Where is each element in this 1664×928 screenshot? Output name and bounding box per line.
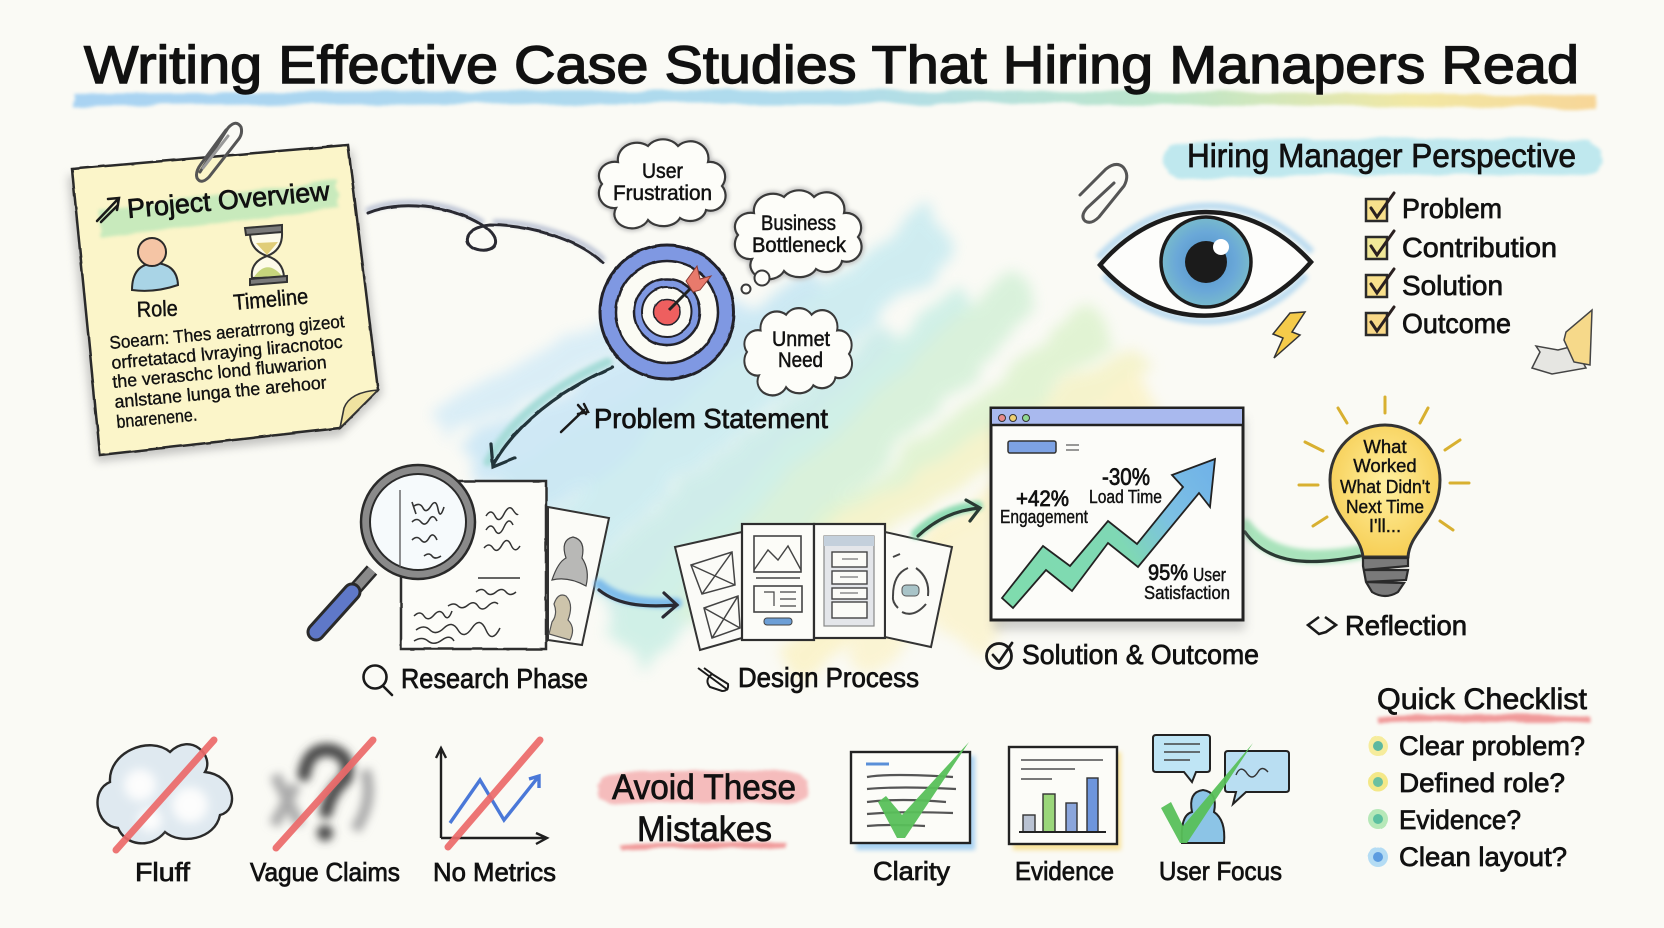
heading: avoid these mistakes: Avoid These	[612, 768, 796, 807]
mistake: fluff	[98, 740, 232, 887]
target bullseye	[600, 245, 734, 379]
mistake: no metrics	[433, 740, 556, 887]
icon: small dart	[561, 404, 588, 432]
label: design process: Design Process	[738, 662, 919, 693]
bulb text: Worked	[1353, 455, 1417, 476]
metric: engagement	[1000, 486, 1088, 527]
thought bubbles	[742, 270, 770, 294]
icon: dart	[669, 266, 711, 310]
checklist: contribution: Contribution	[1402, 232, 1557, 263]
panel: research phase	[316, 465, 609, 695]
metric: engagement: Engagement	[1000, 507, 1088, 527]
icon: pencil arrow	[97, 198, 119, 222]
note shadow	[68, 150, 382, 462]
heading: avoid these mistakes	[612, 768, 796, 849]
item: defined role: Defined role?	[1399, 768, 1565, 798]
metric: engagement: +42%	[1016, 486, 1069, 511]
light rays	[1299, 397, 1469, 530]
bulb text: What Didn't	[1340, 476, 1430, 497]
growth arrow chart	[1002, 459, 1215, 608]
icon: check circle	[986, 643, 1012, 668]
note body text: Soearn: Thes aeratrrong gizeot	[109, 311, 345, 353]
icon: small magnifier	[364, 666, 392, 695]
cloud: business bottleneck	[735, 190, 862, 279]
practice: user focus	[1153, 735, 1289, 886]
cloud: user frustration: Frustration	[613, 182, 712, 205]
heading highlight	[1182, 156, 1584, 160]
note folded corner	[340, 390, 378, 428]
panel: quick checklist	[1368, 683, 1590, 872]
panel: problem statement	[561, 139, 862, 434]
panel: project overview sticky note	[68, 123, 382, 462]
arrow: solution to reflection	[1245, 526, 1362, 562]
label: solution and outcome: Solution & Outcome	[1022, 639, 1259, 670]
section: mistakes to avoid	[98, 740, 796, 887]
title	[74, 36, 1596, 102]
item: evidence: Evidence?	[1399, 805, 1521, 835]
wireframe panel 1	[675, 532, 742, 650]
practice: user focus: User Focus	[1159, 856, 1282, 886]
watercolor diagonal wash	[440, 225, 1150, 665]
icon: paperclip	[1080, 164, 1127, 222]
metric: load time: -30%	[1102, 464, 1150, 491]
mistake: vague claims: Vague Claims	[250, 857, 400, 887]
icon: magnifying glass	[316, 465, 475, 632]
arrow: note to target	[368, 203, 603, 263]
icon: hourglass	[245, 225, 287, 285]
title underline brush stroke	[74, 97, 1596, 102]
heading underline	[1378, 718, 1590, 720]
cloud: unmet need	[744, 308, 852, 395]
arrow: design to solution	[916, 500, 980, 536]
light bulb	[1330, 425, 1440, 596]
item: clear problem: Clear problem?	[1399, 731, 1585, 761]
metric: load time	[1089, 464, 1162, 507]
label: reflection: Reflection	[1345, 610, 1467, 641]
icon: pencil and eraser	[698, 668, 728, 691]
bulb text: Next Time	[1346, 496, 1424, 517]
browser window	[991, 408, 1245, 630]
mistake: vague claims	[250, 740, 400, 887]
checklist: solution: Solution	[1402, 270, 1503, 301]
bulb text: What	[1363, 436, 1407, 457]
icon: torn paper	[1532, 310, 1592, 374]
item: clean layout: Clean layout?	[1399, 842, 1567, 872]
cloud: business bottleneck: Business	[761, 212, 836, 235]
metric: user satisfaction: Satisfaction	[1144, 583, 1230, 603]
metric: user satisfaction: User	[1193, 565, 1226, 585]
icon: role person	[132, 238, 178, 291]
heading: avoid these mistakes: Mistakes	[637, 810, 772, 849]
note body text	[109, 311, 345, 432]
metric: user satisfaction	[1144, 560, 1230, 603]
practice: clarity	[851, 742, 975, 886]
metric: load time: Load Time	[1089, 487, 1162, 507]
icon: lightning	[1273, 312, 1305, 358]
checklist: outcome: Outcome	[1402, 308, 1511, 339]
panel: design process	[675, 524, 952, 693]
practice: evidence	[1009, 747, 1121, 886]
panel: hiring manager perspective	[1080, 137, 1592, 374]
arrow: research to design	[599, 584, 677, 617]
label: problem statement: Problem Statement	[594, 403, 828, 434]
heading highlight	[100, 194, 338, 224]
section: good practices	[851, 735, 1289, 886]
wireframe panel 4	[885, 532, 952, 647]
label: role: Role	[136, 296, 178, 322]
arrow: target to research	[488, 362, 613, 467]
heading: Hiring Manager Perspective	[1187, 137, 1576, 174]
mistake: fluff: Fluff	[135, 857, 191, 887]
panel: solution and outcome	[986, 408, 1259, 670]
cloud: business bottleneck: Bottleneck	[752, 234, 846, 257]
label: timeline: Timeline	[232, 284, 309, 315]
label: research phase: Research Phase	[401, 663, 588, 694]
cloud: user frustration	[599, 139, 726, 228]
heading: Quick Checklist	[1377, 683, 1588, 716]
cloud: user frustration: User	[642, 160, 683, 183]
wireframe panel 2	[742, 524, 814, 640]
title text: Writing Effective Case Studies That Hiring Manapers Read	[84, 36, 1579, 95]
note body text: anlstane lunga the arehoor	[114, 372, 327, 412]
cloud: unmet need: Unmet	[772, 328, 830, 351]
bulb text: I'll...	[1369, 515, 1401, 536]
metric: user satisfaction: 95%	[1148, 560, 1188, 585]
heading: Project Overview	[126, 176, 331, 224]
checklist: problem: Problem	[1402, 193, 1502, 224]
wireframe panel 3	[814, 524, 885, 638]
practice: clarity: Clarity	[873, 856, 950, 886]
practice: evidence: Evidence	[1015, 856, 1114, 886]
bulb text	[1340, 436, 1430, 536]
cloud: unmet need: Need	[778, 349, 823, 372]
icon: diamond arrows	[1308, 617, 1336, 634]
side profile document	[548, 507, 609, 645]
note body text: orfretatacd lvraying liracnotoc	[111, 332, 343, 373]
note paper	[72, 145, 378, 455]
research document	[401, 481, 546, 649]
icon: paperclip on note	[196, 123, 242, 181]
note body text: the veraschc lond fluwarion	[112, 352, 327, 392]
icon: eye	[1098, 206, 1312, 321]
panel: reflection	[1299, 397, 1469, 641]
mistake: no metrics: No Metrics	[433, 857, 556, 887]
note body text: bnarenene.	[116, 405, 198, 432]
